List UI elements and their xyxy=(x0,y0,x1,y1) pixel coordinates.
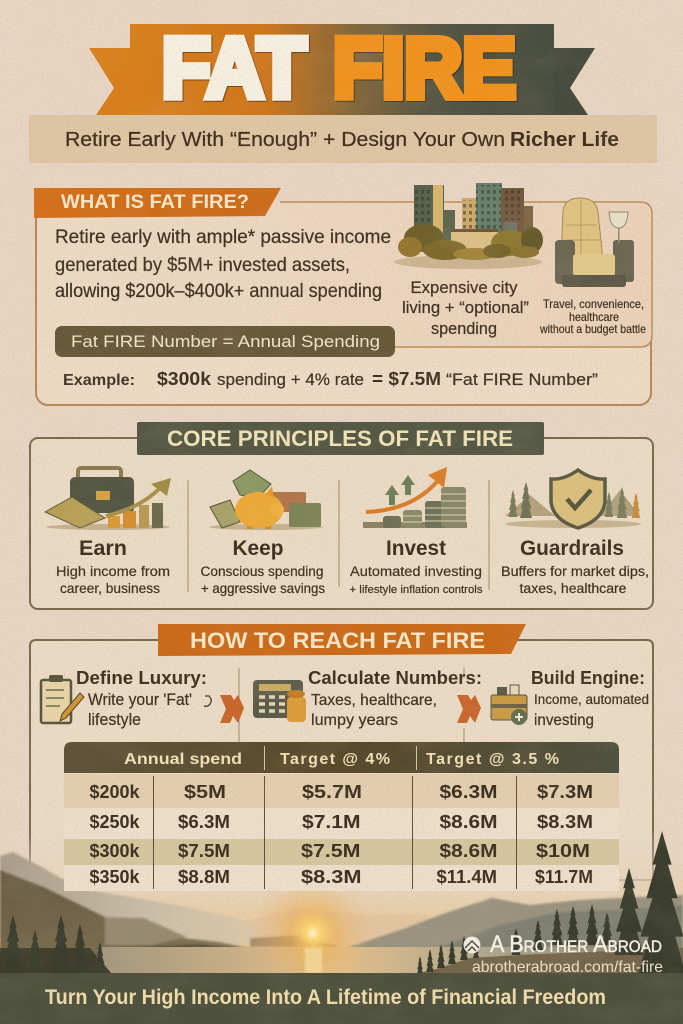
step: calculate numbers: Calculate Numbers: xyxy=(308,668,482,688)
example line: = $7.5M xyxy=(372,369,441,389)
step: define luxury: Define Luxury: xyxy=(76,668,207,688)
brand block: A Brother Abroad xyxy=(490,931,662,958)
heading: how to reach xyxy=(158,624,526,656)
label: earn: High income from xyxy=(56,564,170,579)
step: calculate numbers: lumpy years xyxy=(311,712,398,729)
label: guardrails: Buffers for market dips, xyxy=(501,564,649,579)
icon: clipboard xyxy=(41,675,84,723)
title banner xyxy=(89,21,595,115)
panel: core principles xyxy=(30,422,653,609)
label: invest: Automated investing xyxy=(350,564,482,579)
table row: 250k xyxy=(90,812,593,832)
example line: Example: xyxy=(63,372,135,389)
definition text: allowing $200k–$400k+ annual spending xyxy=(55,281,382,302)
label: invest xyxy=(350,537,483,596)
table row: 350k: $11.4M xyxy=(436,867,497,887)
table header: Target @ 4% xyxy=(280,751,390,768)
step: define luxury: lifestyle xyxy=(88,711,141,729)
table row: 300k: $7.5M xyxy=(301,841,360,861)
caption: city living xyxy=(402,278,529,338)
subtitle band xyxy=(29,115,657,163)
caption: city living: Expensive city xyxy=(410,278,518,297)
table row: 200k: $6.3M xyxy=(440,782,498,802)
table row: 300k: $10M xyxy=(536,841,590,861)
table row: 250k: $8.6M xyxy=(440,812,498,832)
icon: earn briefcase and chart xyxy=(45,468,171,530)
step: build engine: Build Engine: xyxy=(531,668,645,688)
footer landscape xyxy=(0,830,683,993)
title: FIRE: FIRE xyxy=(333,21,516,115)
panel: how to reach xyxy=(30,624,653,880)
label: guardrails: taxes, healthcare xyxy=(520,581,626,596)
icon: keep piggy bank xyxy=(209,470,323,530)
icon: invest coins and arrow xyxy=(363,467,467,528)
brand block xyxy=(464,931,663,976)
label: earn: Earn xyxy=(79,537,127,560)
table row: 350k: $350k xyxy=(90,867,140,887)
table header: Annual spend xyxy=(124,751,242,768)
footer band: Turn Your High Income Into A Lifetime of Financial Freedom xyxy=(45,986,606,1009)
subtitle band: Richer Life xyxy=(510,129,619,151)
title: FAT: FAT xyxy=(162,21,306,115)
label: keep: Conscious spending xyxy=(200,564,324,579)
heading: core principles xyxy=(137,422,544,455)
label: invest: + lifestyle inflation controls xyxy=(350,584,483,596)
icon: guardrails shield xyxy=(505,470,641,528)
icon: engine xyxy=(491,685,527,725)
heading: what is fat fire xyxy=(34,188,281,218)
icon: armchair xyxy=(555,198,634,287)
example line: $300k xyxy=(157,369,212,389)
table row: 350k: $8.3M xyxy=(301,867,362,887)
step: build engine xyxy=(491,668,649,729)
step: calculate numbers xyxy=(253,668,482,729)
label: keep xyxy=(200,537,325,596)
table row: 200k: $200k xyxy=(90,782,140,802)
caption: travel convenience: Travel, convenience, xyxy=(543,297,644,311)
label: guardrails xyxy=(501,537,649,596)
caption: travel convenience: healthcare xyxy=(569,310,619,324)
table row: 250k: $250k xyxy=(90,812,140,832)
heading: core principles: CORE PRINCIPLES OF FAT FIRE xyxy=(167,426,513,451)
table row: 200k xyxy=(90,782,593,802)
example line: “Fat FIRE Number” xyxy=(446,370,598,389)
example line xyxy=(63,369,598,389)
arrow: step 1 to 2 xyxy=(220,695,244,723)
table row: 300k: $7.5M xyxy=(178,841,230,861)
icon: city skyline xyxy=(394,183,543,269)
label: keep: + aggressive savings xyxy=(201,581,325,596)
subtitle band: Retire Early With “Enough” + Design Your Own xyxy=(65,129,505,151)
table row: 250k: $6.3M xyxy=(178,812,230,832)
heading: what is fat fire: WHAT IS FAT FIRE? xyxy=(61,192,249,213)
table row: 300k xyxy=(90,841,590,861)
table row: 200k: $7.3M xyxy=(537,782,593,802)
table row: 200k: $5.7M xyxy=(302,782,362,802)
caption: travel convenience xyxy=(539,297,646,336)
label: keep: Keep xyxy=(232,537,284,560)
sun glow xyxy=(253,873,373,993)
caption: city living: living + “optional” xyxy=(402,298,529,317)
brand block: abrotherabroad.com/fat-fire xyxy=(472,959,663,976)
icon: brand logo xyxy=(464,936,480,954)
table row: 350k xyxy=(90,867,593,887)
table header xyxy=(64,742,619,773)
table row: 200k: $5M xyxy=(184,782,226,802)
table row: 250k: $8.3M xyxy=(537,812,593,832)
label: guardrails: Guardrails xyxy=(520,537,624,560)
table row: 350k: $8.8M xyxy=(178,867,230,887)
caption: city living: spending xyxy=(431,319,497,338)
table row: 350k: $11.7M xyxy=(535,867,593,887)
label: earn: career, business xyxy=(60,581,160,596)
caption: travel convenience: without a budget battle xyxy=(539,322,646,336)
definition text: generated by $5M+ invested assets, xyxy=(55,255,350,276)
definition text: Retire early with ample* passive income xyxy=(55,227,391,248)
step: define luxury xyxy=(41,668,211,729)
footer band xyxy=(0,973,683,1024)
step: define luxury: Write your 'Fat' xyxy=(88,691,192,709)
label: earn xyxy=(56,537,170,596)
icon: calculator xyxy=(253,680,306,722)
step: build engine: investing xyxy=(534,712,594,729)
label: invest: Invest xyxy=(386,537,446,560)
step: calculate numbers: Taxes, healthcare, xyxy=(311,692,437,709)
table row: 300k: $8.6M xyxy=(440,841,498,861)
table row: 250k: $7.1M xyxy=(302,812,360,832)
table row: 300k: $300k xyxy=(90,841,140,861)
formula pill: Fat FIRE Number = Annual Spending xyxy=(71,332,380,351)
arrow: step 2 to 3 xyxy=(457,695,481,723)
panel: what is fat fire xyxy=(34,183,652,405)
example line: spending + 4% rate xyxy=(217,370,364,389)
table xyxy=(64,742,619,891)
definition text xyxy=(55,227,391,302)
step: build engine: Income, automated xyxy=(534,692,649,707)
table header: Target @ 3.5 % xyxy=(426,751,559,768)
formula pill xyxy=(55,326,395,357)
heading: how to reach: HOW TO REACH FAT FIRE xyxy=(190,628,485,653)
